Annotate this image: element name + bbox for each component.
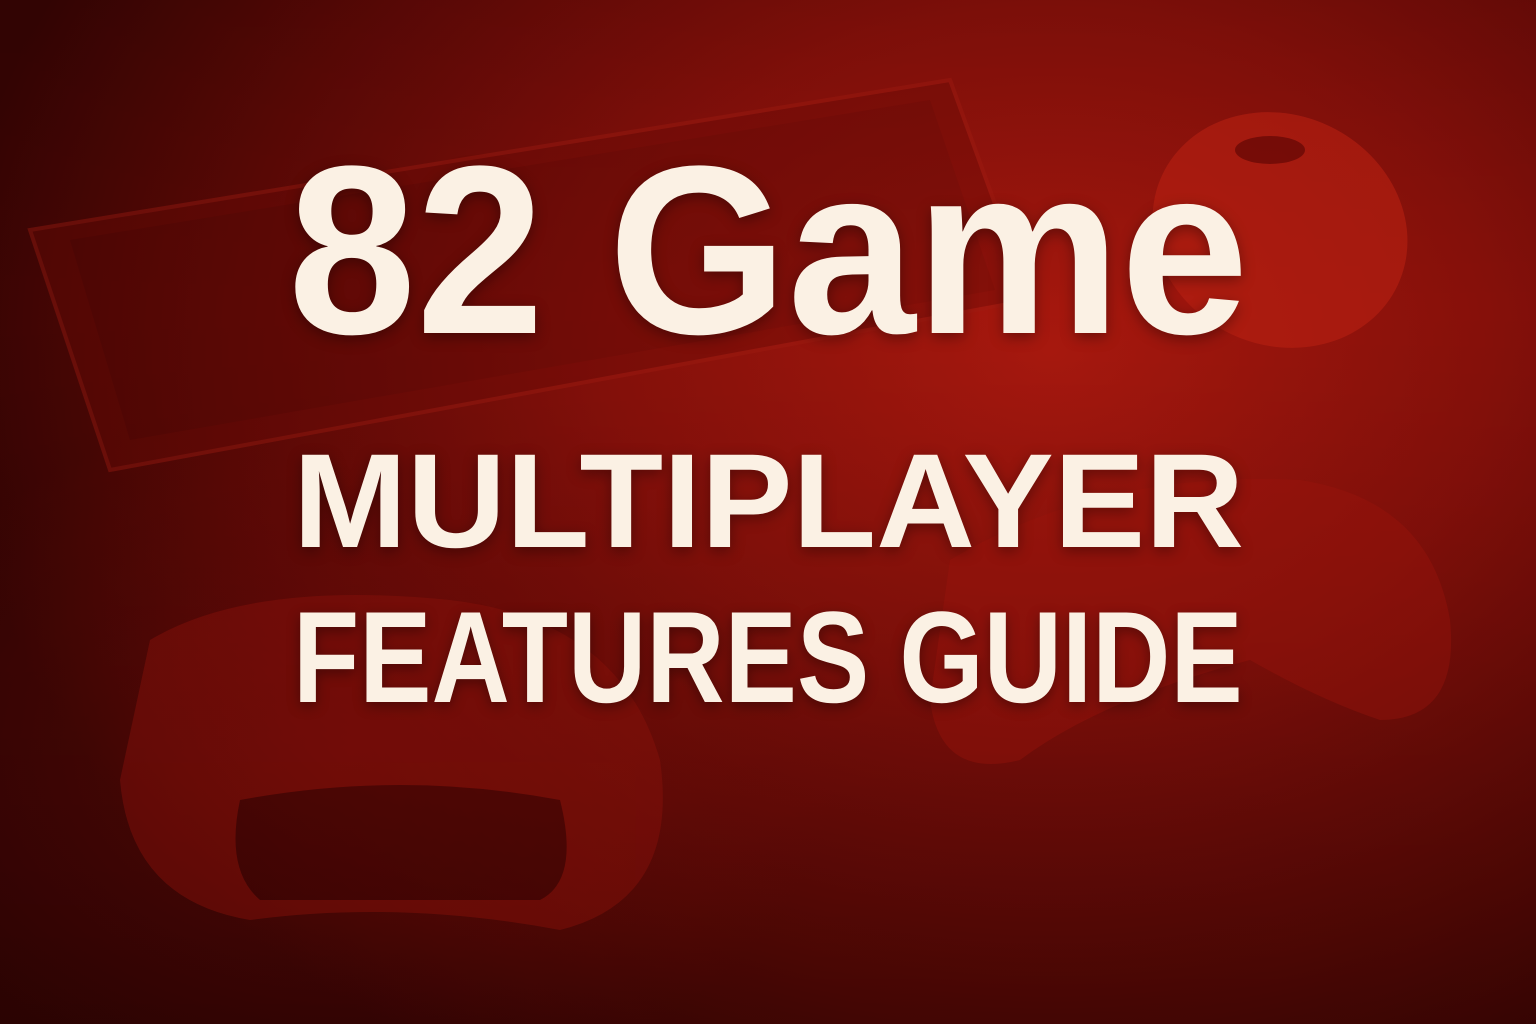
controller right [930, 479, 1451, 764]
controller left [120, 595, 663, 930]
title: 82 Game: 82 Game [288, 116, 1249, 384]
subtitle: MULTIPLAYER: MULTIPLAYER [293, 427, 1244, 576]
subtitle: FEATURES GUIDE: FEATURES GUIDE [293, 584, 1243, 730]
keyboard [30, 80, 1030, 470]
mouse [1114, 71, 1446, 389]
